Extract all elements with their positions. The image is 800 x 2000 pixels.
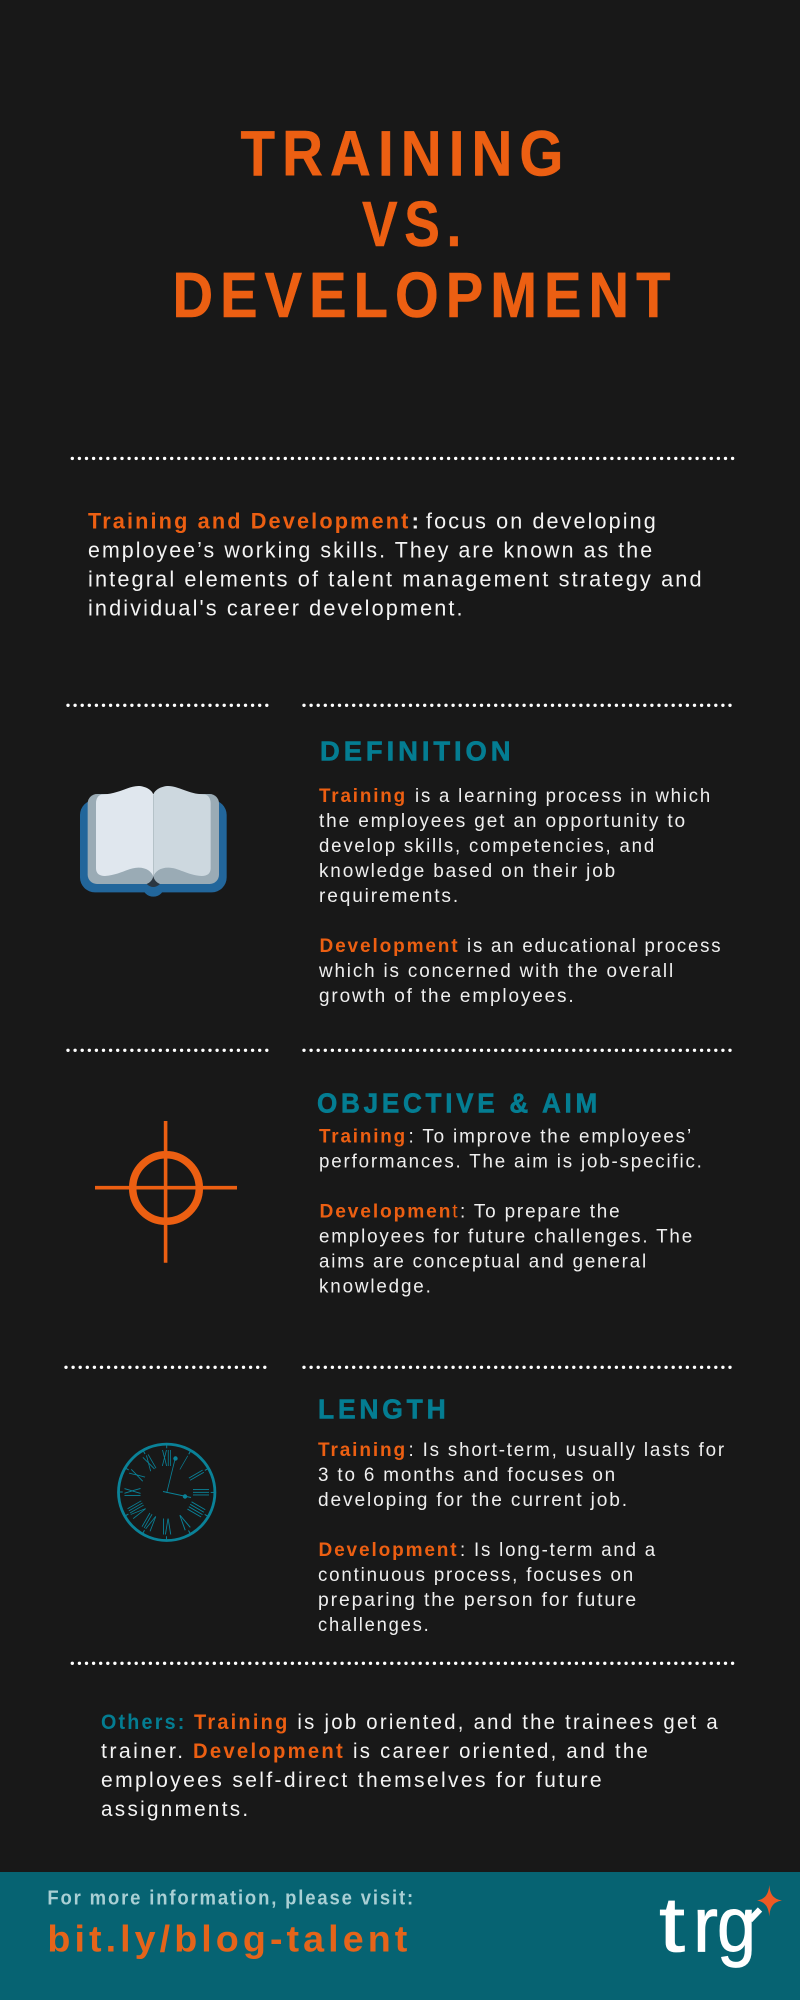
- icon: clock: VIII: [122, 1497, 152, 1522]
- intro text block: Training and Development: [88, 509, 410, 534]
- text block: definition: growth of the employees.: [319, 985, 576, 1007]
- title: DEVELOPMENT: [172, 259, 678, 331]
- text block: definition: develop skills, competencies, and: [319, 835, 656, 857]
- text block: length: developing for the current job.: [318, 1489, 629, 1511]
- section: length: [318, 1394, 726, 1636]
- footer band: [0, 1872, 800, 2000]
- others text block: Development: [193, 1739, 345, 1763]
- text block: objective and aim: performances. The aim is job-specific.: [319, 1150, 704, 1172]
- intro text block: individual's career development.: [88, 596, 465, 621]
- logo: trg: g: [717, 1881, 756, 1969]
- text block: length: 3 to 6 months and focuses on: [318, 1464, 617, 1486]
- text block: length: Training: [318, 1439, 407, 1461]
- text block: definition: knowledge based on their job: [319, 860, 617, 882]
- text block: definition: the employees get an opportunity to: [319, 810, 687, 832]
- icon: clock: VI: [162, 1514, 171, 1540]
- intro text block: focus on developing: [426, 509, 658, 534]
- logo: trg: t: [659, 1881, 685, 1969]
- icon: clock: X: [124, 1466, 150, 1484]
- text block: objective and aim: [319, 1125, 704, 1297]
- others text block: assignments.: [101, 1797, 250, 1821]
- text block: length: preparing the person for future: [318, 1589, 638, 1611]
- heading: objective and aim: OBJECTIVE & AIM: [317, 1088, 601, 1119]
- icon: clock: XI: [140, 1449, 160, 1476]
- text block: definition: Training: [319, 785, 407, 807]
- icon: clock: IIII: [182, 1498, 210, 1521]
- title: VS.: [362, 188, 468, 260]
- intro text block: [88, 509, 704, 621]
- section: definition: [318, 736, 722, 1007]
- text block: objective and aim: aims are conceptual and general: [319, 1250, 648, 1272]
- text block: length: challenges.: [318, 1614, 430, 1636]
- text block: length: Development: [318, 1539, 458, 1561]
- text block: definition: is a learning process in which: [415, 785, 712, 807]
- others text block: trainer.: [101, 1739, 186, 1763]
- title: [172, 118, 678, 331]
- text block: objective and aim: : To improve the employees’: [408, 1125, 693, 1147]
- text block: length: continuous process, focuses on: [318, 1564, 635, 1586]
- title: TRAINING: [240, 118, 570, 190]
- others text block: employees self-direct themselves for future: [101, 1768, 604, 1792]
- intro text block: integral elements of talent management strategy and: [88, 567, 704, 592]
- footer link: bit.ly/blog-talent: [47, 1919, 411, 1960]
- heading: definition: DEFINITION: [320, 736, 514, 767]
- text block: objective and aim: : To prepare the: [460, 1200, 622, 1222]
- text block: definition: which is concerned with the overall: [318, 960, 675, 982]
- text block: definition: Development: [320, 935, 460, 957]
- icon: clock: III: [188, 1488, 214, 1496]
- icon: clock: [118, 1444, 215, 1541]
- logo: trg: [659, 1881, 782, 1969]
- icon: clock: IX: [119, 1488, 145, 1497]
- section: objective and aim: [317, 1088, 704, 1297]
- others text block: [101, 1710, 720, 1821]
- intro text block: employee’s working skills. They are known as the: [88, 538, 654, 563]
- others text block: Others:: [101, 1710, 186, 1734]
- text block: length: : Is short-term, usually lasts for: [408, 1439, 726, 1461]
- intro text block: :: [412, 509, 421, 534]
- icon: clock: VII: [138, 1508, 161, 1536]
- text block: objective and aim: Development: [320, 1200, 460, 1222]
- text block: length: : Is long-term and a: [460, 1539, 657, 1561]
- text block: definition: requirements.: [319, 885, 460, 907]
- text block: objective and aim: knowledge.: [319, 1275, 433, 1297]
- icon: clock: II: [184, 1466, 209, 1484]
- logo: trg: r: [693, 1881, 718, 1969]
- icon: clock: XII: [162, 1445, 172, 1471]
- text block: objective and aim: employees for future challenges. The: [319, 1225, 694, 1247]
- others text block: is job oriented, and the trainees get a: [297, 1710, 720, 1734]
- others text block: is career oriented, and the: [353, 1739, 650, 1763]
- icon: open book: [80, 786, 227, 897]
- text block: definition: is an educational process: [467, 935, 722, 957]
- icon: clock: I: [176, 1451, 191, 1474]
- text block: length: [318, 1439, 726, 1636]
- text block: definition: [318, 785, 722, 1007]
- heading: length: LENGTH: [318, 1394, 450, 1425]
- icon: crosshair target: [95, 1121, 237, 1263]
- icon: clock: V: [174, 1509, 193, 1535]
- footer prompt: For more information, please visit:: [47, 1887, 415, 1909]
- others text block: Training: [194, 1710, 290, 1734]
- text block: objective and aim: Training: [319, 1125, 407, 1147]
